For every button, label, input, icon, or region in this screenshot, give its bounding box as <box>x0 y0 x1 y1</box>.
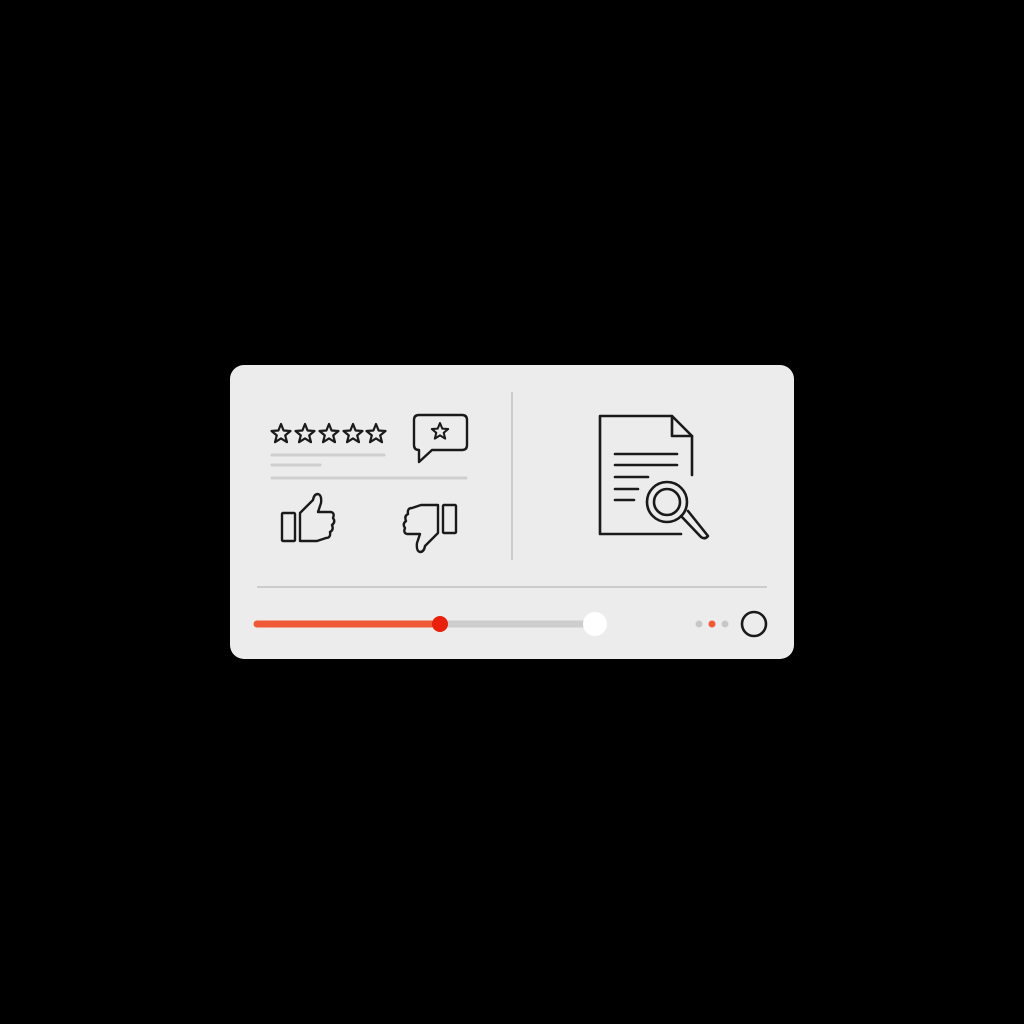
progress slider <box>257 612 607 636</box>
panel: card <box>230 365 794 659</box>
pagination dots <box>696 620 728 628</box>
icon: thumbs up <box>282 494 334 541</box>
separator line <box>257 586 767 588</box>
text placeholder lines <box>272 455 466 478</box>
icon: five stars <box>272 424 386 442</box>
icon: circle button <box>742 612 766 636</box>
icon: document with magnifier <box>600 416 708 538</box>
icon: thumbs down <box>404 505 456 552</box>
divider <box>511 392 513 560</box>
icon: speech bubble with star <box>414 415 467 462</box>
